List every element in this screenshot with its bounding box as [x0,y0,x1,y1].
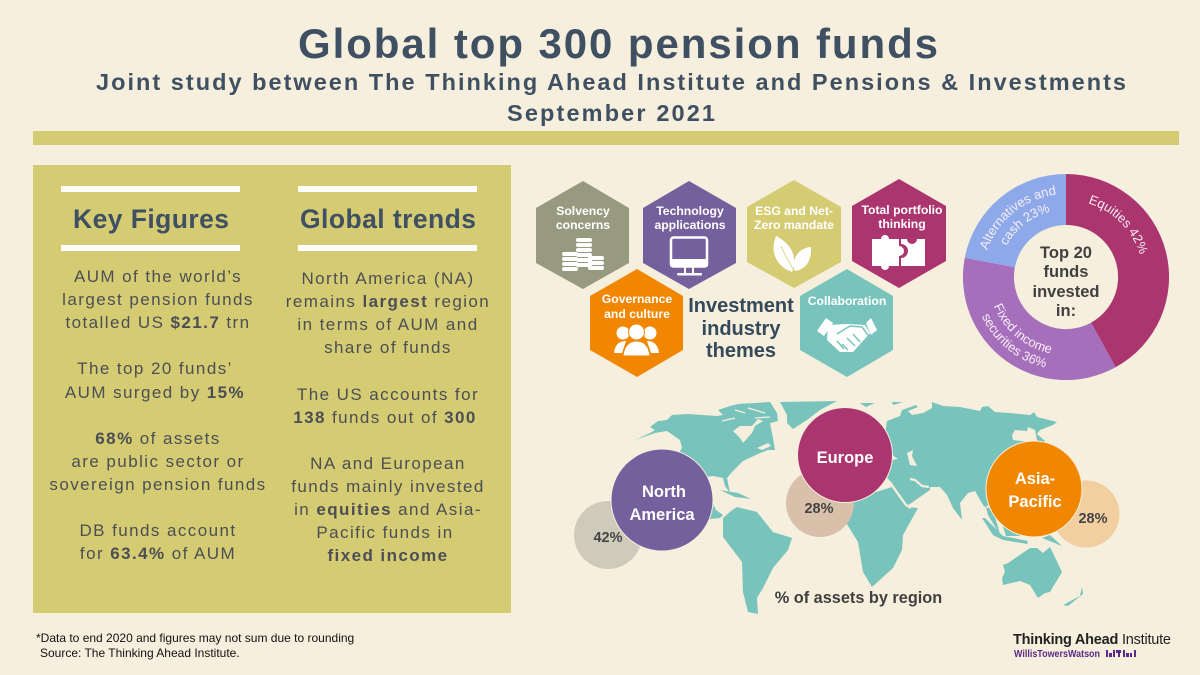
text block: global trends: NA and European [310,454,466,473]
bubble: europe share [786,469,854,537]
heading: investment industry themes [688,295,794,362]
text block: key figures: The top 20 funds’ [77,359,233,378]
label: equities: Equities 42% [1089,195,1148,254]
footnote [36,631,354,660]
text block: global trends: The US accounts for [297,385,479,404]
bubble: asia-pacific: Asia- [1015,470,1055,488]
icon: people [614,324,659,356]
text block: global trends: remains largest region [286,292,490,311]
hexagon: governance and culture: Governance [602,292,672,306]
footnote: Source: The Thinking Ahead Institute. [40,646,240,660]
heading: key figures: Key Figures [73,204,229,234]
label: fixed income securities: securities 36% [982,314,1046,368]
text block: key figures [49,267,267,563]
text block: global trends: in terms of AUM and [297,315,479,334]
heading: investment industry themes: industry [702,318,781,340]
label: alternatives and cash: cash 23% [1002,204,1050,244]
text block: global trends: Pacific funds in [316,523,454,542]
donut centre label: invested [1033,283,1099,301]
text block: key figures: AUM surged by 15% [65,383,245,402]
bubble: asia-pacific share [1052,480,1120,548]
bubble: north america: America [629,506,695,524]
text block: global trends: fixed income [327,546,449,565]
icon: coins [562,238,604,271]
header band [33,131,1179,145]
donut chart: top 20 funds invested in [962,174,1170,380]
bubble: europe [798,408,892,502]
heading: global trends: Global trends [300,204,476,234]
icon: monitor [670,238,708,276]
text block: global trends: in equities and Asia- [294,500,482,519]
hexagon: collaboration [800,269,893,377]
text block: global trends: funds mainly invested [291,477,485,496]
hexagon: solvency concerns: Solvency [556,204,610,218]
footnote: *Data to end 2020 and figures may not sum due to rounding [36,631,354,645]
donut centre label: in: [1056,302,1076,320]
logo: thinking ahead institute: WillisTowersWatson [1014,648,1100,660]
donut centre label: Top 20 [1040,244,1092,262]
hexagon: technology applications: Technology [656,204,724,218]
donut centre label [1033,244,1099,320]
world map [635,401,1083,614]
hexagon: technology applications: applications [654,218,726,232]
heading: investment industry themes: themes [706,340,776,362]
date: September 2021 [507,100,715,126]
hexagon: esg and net-zero mandate: Zero mandate [754,218,834,232]
bubble: europe: Europe [817,449,873,467]
logo: thinking ahead institute [1013,632,1171,660]
text block: key figures: totalled US $21.7 trn [65,313,251,332]
logo: thinking ahead institute: Thinking Ahead Institute [1013,632,1171,648]
text block: key figures: AUM of the world’s [74,267,242,286]
text block: global trends: North America (NA) [301,269,475,288]
bubble: asia-pacific [986,441,1082,537]
hexagon: solvency concerns: concerns [556,218,610,232]
bubble: north america: North [642,483,686,501]
bubble: asia-pacific share: 28% [1078,511,1108,527]
panel: key figures and global trends [33,165,511,613]
icon: puzzle [872,235,925,270]
subtitle: Joint study between The Thinking Ahead Institute and Pensions & Investments [96,69,1126,95]
bubble: asia-pacific: Pacific [1008,493,1062,511]
text block: global trends [286,269,490,565]
heading: investment industry themes: Investment [688,295,794,317]
label: fixed income securities: Fixed income [994,303,1052,353]
hexagon: total portfolio thinking: thinking [878,217,926,231]
donut centre label: funds [1044,263,1088,281]
hexagon: solvency concerns [536,181,629,289]
map cut-outs: inland seas and bays [733,419,1040,466]
text block: key figures: largest pension funds [62,290,254,309]
hexagon: total portfolio thinking [852,179,946,288]
hexagon: collaboration: Collaboration [808,294,886,308]
text block: global trends: share of funds [324,338,452,357]
text block: key figures: are public sector or [71,452,245,471]
text block: key figures: DB funds account [79,521,237,540]
text block: global trends: 138 funds out of 300 [293,408,477,427]
icon: handshake [817,318,877,352]
hexagon: esg and net-zero mandate [747,180,841,288]
map caption: % of assets by region [775,589,942,607]
text block: key figures: for 63.4% of AUM [80,544,236,563]
bubble: north america share: 42% [593,530,623,546]
text block: key figures: 68% of assets [95,429,221,448]
text block: key figures: sovereign pension funds [49,475,267,494]
hexagon: total portfolio thinking: Total portfolio [861,203,943,217]
icon: leaves [774,236,811,272]
title: Global top 300 pension funds [298,20,938,67]
label: alternatives and cash: Alternatives and [980,185,1056,250]
bubble: europe share: 28% [804,501,834,517]
bubble: north america share [574,501,642,569]
hexagon: governance and culture [590,269,683,377]
hexagon: governance and culture: and culture [604,307,670,321]
bubble: north america [611,449,713,551]
hexagon: esg and net-zero mandate: ESG and Net- [755,204,833,218]
hexagon: technology applications [643,181,736,289]
